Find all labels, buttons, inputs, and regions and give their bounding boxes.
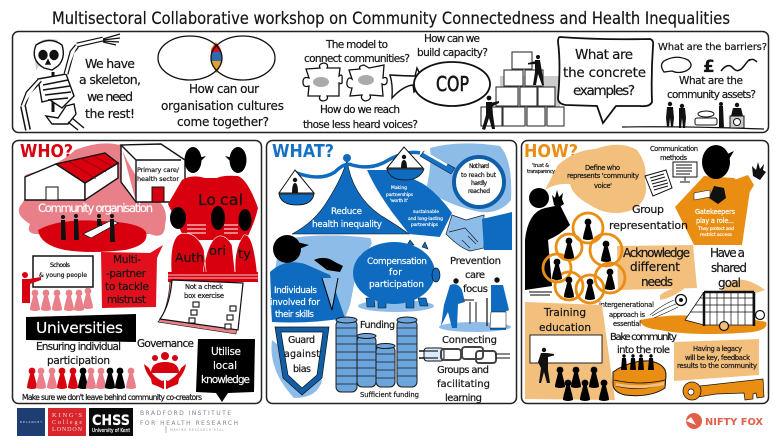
blob: legacy: will be key, feedback bbox=[685, 354, 750, 362]
callout: concrete examples: examples? bbox=[573, 83, 635, 99]
blob: legacy bbox=[674, 339, 759, 381]
text: trust and transparency bbox=[527, 163, 555, 175]
text: trust and transparency: 'trust & bbox=[532, 163, 549, 169]
text: bake community: into the role bbox=[617, 345, 670, 356]
icon: puzzle pieces bbox=[303, 63, 387, 101]
icon: gatekeeper: Gatekeepers bbox=[695, 208, 736, 216]
panel: WHO bbox=[12, 140, 262, 404]
icon: scales of inequality: Reduce bbox=[331, 207, 362, 217]
text: barriers: What are the barriers? bbox=[658, 42, 767, 53]
logo: King's College London bbox=[48, 408, 86, 436]
icon: schools board: & young people bbox=[39, 272, 87, 279]
icon: skeleton bbox=[23, 34, 120, 130]
logo: CHSS: University of Kent bbox=[92, 428, 130, 434]
panel: WHAT bbox=[266, 140, 516, 404]
icon: scales of inequality: partnerships bbox=[386, 192, 414, 198]
icon: check box paper bbox=[158, 280, 243, 334]
icon: pointing individual: involved for bbox=[270, 298, 320, 308]
icon: piggy bank bbox=[353, 240, 440, 312]
icon: piggy bank: participation bbox=[369, 280, 424, 290]
icon: gatekeeper: play a role... bbox=[696, 217, 734, 225]
text: groups and learning: learning bbox=[445, 393, 482, 404]
icon: scales of inequality: health inequality bbox=[312, 220, 382, 230]
text: skeleton: the rest! bbox=[85, 106, 135, 121]
text: groups and learning: facilitating bbox=[437, 379, 490, 390]
blob: acknowledge different needs: Acknowledge bbox=[623, 246, 690, 260]
text: community organisation: Community organisation bbox=[38, 201, 153, 215]
text: reach less heard: How do we reach bbox=[320, 104, 400, 116]
icon: primary care building bbox=[121, 144, 185, 202]
icon: scales of inequality: and long-lasting bbox=[408, 216, 443, 222]
text: group representation: Group bbox=[632, 203, 664, 216]
callout: multi-partner: to tackle bbox=[105, 281, 149, 293]
text: build capacity: How can we bbox=[424, 33, 480, 45]
icon: key bbox=[683, 379, 764, 400]
text: bake community bbox=[610, 332, 677, 356]
icon: scales of inequality: partnerships bbox=[411, 222, 439, 228]
text: skeleton bbox=[79, 56, 141, 121]
icon: hands holding people bbox=[144, 352, 186, 389]
icon: local authority people: Lo bbox=[198, 191, 216, 209]
text: have a shared goal bbox=[710, 246, 765, 294]
icon: meeting table on red blob bbox=[38, 214, 147, 252]
blob: define community voice bbox=[545, 145, 646, 213]
text: groups and learning: Groups and bbox=[437, 365, 489, 376]
icon: local authority people: cal bbox=[220, 191, 243, 209]
panel: training education bbox=[525, 302, 615, 401]
icon: local authority people: ori bbox=[209, 243, 226, 258]
text: build capacity bbox=[417, 33, 488, 59]
text: intergenerational approach: intergenerational bbox=[599, 301, 654, 309]
icon: check box paper: Not a check bbox=[185, 283, 223, 291]
logo: Bradford Institute bbox=[140, 410, 238, 433]
text: organisation cultures bbox=[161, 82, 284, 129]
icon: magnifying glass: reached bbox=[468, 188, 490, 195]
icon: goal and footballs bbox=[640, 288, 766, 334]
text: have a shared goal: Have a bbox=[710, 246, 745, 260]
icon: squiggle bbox=[721, 59, 757, 71]
icon: primary care building: health sector bbox=[137, 175, 179, 183]
callout: multi-partner bbox=[101, 245, 163, 308]
icon: venn diagram bbox=[158, 36, 275, 80]
text: model to connect: The model to bbox=[325, 39, 388, 51]
icon: gatekeeper bbox=[675, 145, 766, 245]
text: community assets bbox=[667, 75, 756, 101]
text: have a shared goal: goal bbox=[718, 276, 741, 290]
callout: utilise local knowledge: knowledge bbox=[201, 374, 250, 386]
logo: Nifty Fox: NIFTY FOX bbox=[705, 417, 763, 428]
text: prevention care focus bbox=[450, 256, 501, 295]
text: organisation cultures: organisation cultures bbox=[161, 99, 284, 113]
callout: concrete examples: the concrete bbox=[563, 65, 646, 81]
icon: gatekeeper: restrict access bbox=[700, 232, 733, 238]
text: individual participation: Ensuring individual bbox=[36, 341, 121, 353]
icon: community hall bbox=[25, 153, 118, 200]
logo: King's College London: College bbox=[52, 420, 82, 426]
icon: primary care building: Primary care/ bbox=[137, 166, 180, 174]
icon: COP bubble: COP bbox=[436, 72, 469, 96]
icon: coin stacks bbox=[336, 317, 417, 392]
logo: CHSS: CHSS bbox=[92, 413, 130, 429]
callout: utilise local knowledge: Utilise bbox=[211, 346, 241, 358]
logo: Bradford Institute: MAKING RESEARCH REAL bbox=[170, 428, 224, 432]
icon: community figures bbox=[622, 102, 764, 129]
logo: Delancey: DELANCEY bbox=[20, 420, 42, 424]
blob: define community voice: Define who bbox=[585, 164, 620, 172]
callout: concrete examples: What are bbox=[575, 47, 633, 63]
text: groups and learning bbox=[437, 365, 490, 404]
icon: scales of inequality: 'worth it' bbox=[390, 198, 408, 204]
icon: schools board: Schools bbox=[50, 262, 70, 269]
text: community assets: What are the bbox=[679, 75, 743, 87]
blob: acknowledge different needs: different bbox=[630, 260, 680, 274]
callout: utilise local knowledge: local bbox=[213, 360, 237, 372]
text: model to connect: connect communities? bbox=[304, 53, 410, 65]
heading: WHAT: WHAT? bbox=[272, 141, 334, 162]
panel: top questions bbox=[12, 32, 768, 132]
icon: presenter and pupils bbox=[22, 272, 93, 311]
icon: local authority people bbox=[168, 147, 258, 282]
icon: handshake bbox=[446, 212, 512, 251]
icon: shield: Guard bbox=[288, 335, 315, 346]
icon: pound sign: £ bbox=[703, 57, 715, 77]
icon: magnifying glass: hardly bbox=[471, 180, 487, 187]
callout: multi-partner: -partner bbox=[106, 268, 147, 280]
icon: newspaper and monitor bbox=[645, 162, 697, 196]
icon: local authority people: Auth bbox=[175, 250, 204, 265]
text: community assets: community assets? bbox=[667, 89, 756, 101]
icon: piggy bank: Compensation bbox=[367, 257, 427, 267]
text: trust and transparency: transparency bbox=[527, 169, 555, 175]
panel: training education: Training bbox=[543, 307, 586, 319]
text: intergenerational approach: approach is bbox=[609, 311, 645, 319]
text: governance: Governance bbox=[137, 338, 194, 350]
text: prevention care focus: focus bbox=[463, 284, 488, 295]
blob: legacy: Having a legacy bbox=[693, 345, 742, 353]
icon: chain bbox=[419, 347, 510, 363]
text: individual participation: participation bbox=[47, 355, 110, 367]
icon: speech bubble bbox=[662, 57, 691, 72]
blob: acknowledge different needs bbox=[617, 245, 697, 290]
icon: cake with people bbox=[613, 354, 666, 396]
logo: King's College London: KING'S bbox=[52, 412, 82, 419]
icon: gatekeeper: They protect and bbox=[697, 226, 734, 232]
label: universities bbox=[26, 314, 136, 342]
blob: define community voice: represents 'community bbox=[567, 172, 639, 180]
text: organisation cultures: How can our bbox=[189, 82, 259, 96]
text: reach less heard: those less heard voices? bbox=[303, 119, 418, 131]
logo: CHSS bbox=[89, 408, 133, 436]
text: skeleton: we need bbox=[87, 89, 133, 104]
text: prevention care focus: Prevention bbox=[450, 256, 501, 267]
text: funding: Funding bbox=[360, 320, 395, 331]
icon: COP bubble bbox=[414, 62, 490, 106]
blob: define community voice: voice' bbox=[594, 182, 612, 190]
icon: pointing individual: their skills bbox=[275, 310, 314, 320]
icon: scales of inequality: sustainable bbox=[413, 209, 439, 215]
icon: arrow to COP bbox=[390, 68, 424, 98]
icon: pointing individual: Individuals bbox=[274, 286, 317, 296]
text: skeleton: We have bbox=[85, 56, 135, 71]
logo: King's College London: LONDON bbox=[52, 427, 83, 433]
icon: connected people circles bbox=[543, 213, 625, 303]
blob: acknowledge different needs: needs bbox=[641, 275, 673, 289]
icon: row of people bbox=[27, 368, 136, 389]
text: have a shared goal: shared bbox=[711, 261, 747, 275]
icon: shield: bias bbox=[293, 364, 311, 375]
text: co-creators: Make sure we don't leave behind community co-creators bbox=[22, 393, 202, 402]
text: group representation bbox=[609, 203, 688, 232]
callout: multi-partner: Multi- bbox=[113, 254, 141, 266]
text: group representation: representation bbox=[609, 219, 688, 232]
text: intergenerational approach: essential bbox=[613, 320, 641, 328]
icon: elderly people with walker bbox=[439, 277, 511, 332]
text: communication methods: methods bbox=[660, 154, 687, 162]
panel: training education: education bbox=[539, 322, 591, 334]
text: sufficient funding: Sufficient funding bbox=[360, 391, 419, 399]
text: bake community: Bake community bbox=[610, 332, 677, 343]
panel: HOW bbox=[522, 140, 768, 404]
icon: pointing individual bbox=[270, 235, 372, 322]
text: reach less heard bbox=[303, 104, 418, 131]
icon: piggy bank: for bbox=[389, 268, 402, 278]
blob: community organisation background bbox=[19, 143, 166, 236]
icon: pyramid of blocks bbox=[481, 52, 564, 130]
logo: Nifty Fox bbox=[686, 413, 763, 429]
logo: Bradford Institute: FOR HEALTH RESEARCH bbox=[140, 420, 238, 427]
callout: utilise local knowledge bbox=[196, 339, 255, 402]
text: communication methods bbox=[650, 145, 698, 162]
icon: waving figure bbox=[525, 188, 570, 295]
logo: Delancey bbox=[17, 408, 45, 436]
text: model to connect bbox=[304, 39, 410, 65]
icon: scales of inequality bbox=[279, 147, 453, 237]
heading: HOW: HOW? bbox=[524, 141, 578, 162]
logo: Bradford Institute: BRADFORD INSTITUTE bbox=[140, 410, 231, 417]
icon: schools board bbox=[33, 256, 93, 287]
text: connecting: Connecting bbox=[442, 335, 497, 346]
text: communication methods: Communication bbox=[650, 145, 698, 153]
callout: concrete examples bbox=[558, 37, 653, 123]
text: intergenerational approach bbox=[599, 301, 654, 328]
callout: multi-partner: mistrust bbox=[107, 294, 146, 306]
text: prevention care focus: care bbox=[465, 270, 485, 281]
icon: shield bbox=[271, 327, 329, 398]
text: individual participation bbox=[36, 341, 121, 367]
icon: scales of inequality: Making bbox=[391, 185, 407, 191]
text: organisation cultures: come together? bbox=[177, 115, 269, 129]
text: skeleton: a skeleton, bbox=[79, 72, 141, 87]
icon: shield: against bbox=[284, 349, 320, 360]
icon: check box paper: box exercise bbox=[184, 292, 224, 300]
icon: local authority people: ty bbox=[238, 246, 252, 261]
blob: legacy: results to the community bbox=[677, 362, 757, 370]
icon: magnifying glass bbox=[420, 143, 511, 212]
heading: WHO: WHO? bbox=[20, 141, 73, 162]
label: universities: Universities bbox=[36, 319, 123, 337]
icon: magnifying glass: to reach but bbox=[461, 172, 497, 179]
text: build capacity: build capacity? bbox=[417, 47, 488, 59]
icon: magnifying glass: Not hard bbox=[469, 163, 489, 170]
